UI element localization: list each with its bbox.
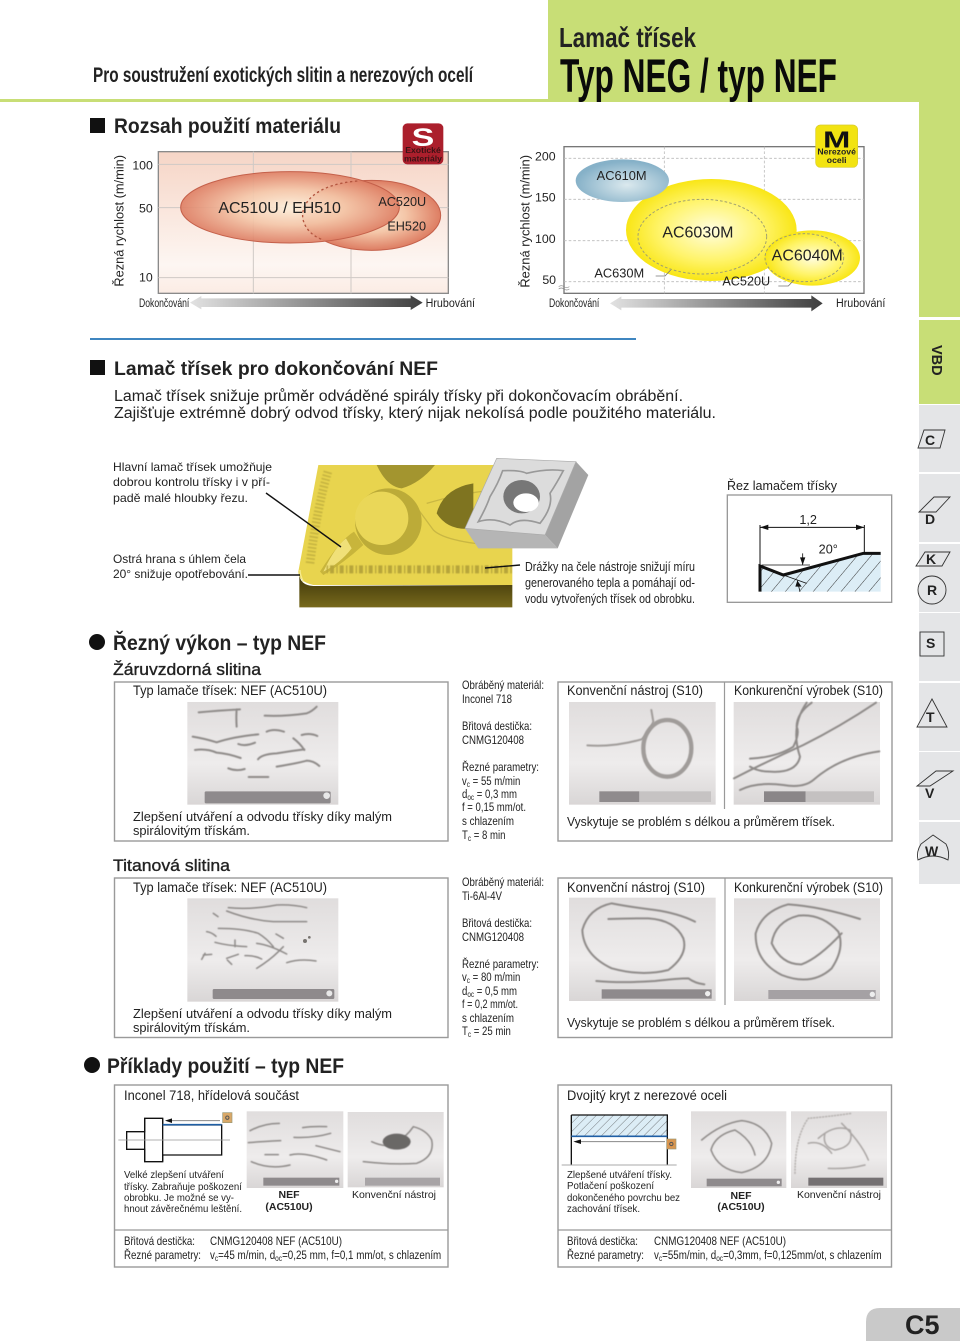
caption: Potlačení poškození	[567, 1180, 654, 1192]
caption	[133, 809, 392, 838]
text block: titanium parameters: CNMG120408	[462, 930, 524, 944]
text block: Inconel parameters: Inconel 718	[462, 692, 512, 706]
callout: main chip breaker: dobrou kontrolu třísky i v pří-	[113, 475, 270, 489]
chart: exotic materials	[111, 123, 475, 310]
parameters: oc	[716, 1253, 723, 1263]
tab: VBD: VBD	[928, 345, 944, 376]
text block: Inconel parameters: Břitová destička:	[462, 719, 532, 733]
text block: titanium parameters: c	[467, 975, 470, 985]
arrow: finishing to roughing	[549, 295, 886, 311]
label: NEF	[717, 1190, 765, 1213]
panel: comparison Inconel	[558, 682, 892, 841]
parameters: oc	[275, 1253, 282, 1263]
diagram: shaft	[118, 1113, 232, 1162]
caption: Zlepšení utváření a odvodu třísky díky malým	[133, 1006, 392, 1021]
tab: V	[917, 771, 953, 801]
text block: Inconel parameters: s chlazením	[462, 814, 514, 828]
subtitle: Pro soustružení: Pro soustružení exotických slitin a nerezových ocelí	[93, 64, 474, 87]
panel: comparison Inconel: Vyskytuje se problém s délkou a průměrem třísek.	[567, 814, 835, 829]
caption	[124, 1169, 242, 1215]
text block: titanium parameters: = 25 min	[471, 1025, 511, 1038]
labels: AC520U and EH520: AC520U	[378, 195, 426, 209]
photo: NEF chips	[691, 1111, 786, 1188]
panel: comparison titanium: Konvenční nástroj (S10)	[567, 880, 705, 895]
text block: titanium parameters: Obráběný materiál:	[462, 875, 544, 889]
text block: Inconel parameters: c	[468, 833, 471, 843]
callout leader lines	[248, 493, 520, 575]
text block: titanium parameters	[462, 875, 544, 1039]
panel: comparison titanium: Vyskytuje se problém s délkou a průměrem třísek.	[567, 1015, 835, 1030]
axis ticks: 50	[542, 273, 556, 287]
parameters: =0,3mm, f=0,125mm/ot, s chlazením	[723, 1249, 882, 1262]
badge: S: Exotické	[405, 145, 441, 155]
axis ticks: 100	[132, 158, 153, 172]
panel: NEF Inconel	[114, 682, 448, 841]
arrow: finishing to roughing: Dokončování	[549, 296, 600, 310]
caption: Velké zlepšení utváření	[124, 1169, 224, 1181]
axis label: Řezná rychlost (m/min)	[517, 155, 532, 288]
axis ticks: 200	[535, 150, 556, 164]
label: AC520U	[722, 274, 794, 288]
photo: conventional chips	[348, 1112, 444, 1187]
arrow: finishing to roughing	[139, 295, 475, 310]
parameters: Řezné parametry:	[124, 1247, 201, 1262]
caption: spirálovitým třískám.	[133, 1020, 250, 1035]
axis ticks	[132, 158, 153, 284]
callout: grooves: vodu vytvořených třísek od obrobku.	[525, 591, 695, 606]
tab: S: S	[926, 635, 935, 651]
text block: titanium parameters: v	[462, 971, 467, 984]
text block: Inconel parameters: f = 0,15 mm/ot.	[462, 800, 526, 814]
parameters: CNMG120408 NEF (AC510U)	[210, 1234, 342, 1248]
tab: K: K	[926, 551, 936, 567]
text block: Inconel parameters: c	[467, 779, 470, 789]
label: NEF: NEF	[730, 1190, 752, 1202]
ellipse: AC6040M	[765, 230, 860, 286]
tab: C: C	[925, 432, 935, 448]
caption: hnout závěrečnému leštění.	[124, 1203, 242, 1215]
text block: Inconel parameters	[462, 678, 544, 843]
label: conventional: Konvenční nástroj	[797, 1189, 881, 1201]
panel: Inconel shaft example	[114, 1085, 448, 1267]
photo: conventional chips	[569, 702, 716, 805]
tab: D	[919, 497, 950, 527]
text block: Inconel parameters: Řezné parametry:	[462, 759, 539, 774]
ellipse: AC520U / EH520	[303, 180, 441, 250]
text block: Inconel parameters: = 55 m/min	[470, 775, 520, 788]
axis break mark	[559, 286, 569, 290]
parameters: =45 m/min, d	[218, 1249, 275, 1262]
text block: titanium parameters: = 0,5 mm	[474, 985, 517, 998]
caption: třísky. Zabraňuje poškození	[124, 1181, 242, 1193]
caption: spirálovitým třískám.	[133, 823, 250, 838]
badge: M: oceli	[827, 155, 847, 165]
ellipse: AC6030M	[626, 179, 797, 281]
callout: main chip breaker: padě malé hloubky řezu.	[113, 491, 248, 505]
badge: M: M	[823, 126, 850, 152]
arrow: finishing to roughing: Hrubování	[426, 296, 475, 310]
caption: Zlepšení utváření a odvodu třísky díky malým	[133, 809, 392, 824]
caption: Zlepšené utváření třísky.	[567, 1169, 672, 1181]
heading: Příklady použití: Příklady použití – typ NEF	[107, 1055, 344, 1078]
label: NEF: (AC510U)	[265, 1201, 313, 1213]
panel: NEF titanium: Typ lamače třísek: NEF (AC510U)	[133, 880, 327, 895]
badge: S	[403, 123, 443, 164]
parameters: v	[210, 1249, 215, 1262]
small grey insert	[465, 458, 588, 548]
tab: S	[920, 632, 944, 656]
caption	[567, 1169, 680, 1215]
text block: Inconel parameters: oc	[467, 792, 474, 802]
axis ticks	[535, 150, 556, 287]
text block: Inconel parameters: d	[462, 788, 467, 801]
callout: grooves: Drážky na čele nástroje snižují míru	[525, 559, 695, 574]
heading: Lamač třísek pro dokončování NEF: Lamač třísek pro dokončování NEF	[114, 359, 438, 380]
chart: stainless steels	[517, 125, 886, 311]
text block: intro: Zajišťuje extrémně dobrý odvod třísky, který nijak nekolísá podle použitého materiálu.	[114, 405, 716, 422]
text block: titanium parameters: s chlazením	[462, 1011, 514, 1025]
badge: S: S	[412, 125, 434, 152]
photo: NEF chips	[247, 1111, 343, 1188]
ellipse: AC6040M: AC6040M	[772, 248, 843, 265]
callout: grooves	[525, 559, 695, 606]
labels: AC520U and EH520: EH520	[387, 220, 426, 234]
axis ticks: 50	[139, 201, 153, 215]
panel: comparison Inconel: Konkurenční výrobek (S10)	[734, 683, 883, 698]
ellipse: AC6030M: AC6030M	[662, 224, 733, 241]
parameters: Břitová destička:	[124, 1234, 195, 1248]
label: conventional: Konvenční nástroj	[352, 1189, 436, 1201]
text block: titanium parameters: Ti-6Al-4V	[462, 889, 502, 903]
parameters: Řezné parametry:	[567, 1247, 644, 1262]
axis ticks: 10	[139, 270, 153, 284]
tab: K	[916, 551, 950, 567]
page number	[866, 1308, 960, 1341]
photo: competitor chips	[734, 702, 880, 805]
label: NEF: NEF	[278, 1189, 300, 1201]
text block: Inconel parameters: = 8 min	[471, 829, 505, 842]
labels: AC520U and EH520	[378, 195, 426, 234]
parameters: c	[659, 1253, 662, 1263]
photo: NEF chips	[187, 702, 338, 805]
panel: stainless cover example	[558, 1085, 892, 1267]
dimension: 1,2: 1,2	[799, 513, 817, 527]
photo: conventional chips	[569, 898, 716, 1001]
heading: Řezný výkon: Řezný výkon – typ NEF	[113, 631, 326, 655]
divider line blue	[90, 338, 636, 340]
label: AC630M	[594, 265, 671, 280]
panel: stainless cover example: Dvojitý kryt z nerezové oceli	[567, 1088, 727, 1103]
text block: titanium parameters: f = 0,2 mm/ot.	[462, 997, 518, 1011]
text block: titanium parameters: = 80 m/min	[470, 971, 520, 984]
panel: NEF titanium	[114, 878, 448, 1038]
parameters: c	[215, 1253, 218, 1263]
text block: titanium parameters: Řezné parametry:	[462, 956, 539, 971]
tab: D: D	[925, 511, 935, 527]
callout: sharp edge	[113, 552, 248, 581]
text block: Inconel parameters: CNMG120408	[462, 733, 524, 747]
label: AC520U: AC520U	[722, 274, 770, 288]
callout: grooves: generovaného tepla a pomáhají od-	[525, 575, 695, 590]
badge: M	[816, 125, 858, 167]
callout: main chip breaker	[113, 460, 272, 505]
text block: titanium parameters: c	[468, 1029, 471, 1039]
text block: Inconel parameters: v	[462, 775, 467, 788]
parameters	[124, 1234, 441, 1263]
page number: C5	[905, 1310, 940, 1340]
photo: competitor chips	[734, 898, 880, 1001]
caption: dokončeného povrchu bez	[567, 1192, 680, 1204]
caption	[133, 1006, 392, 1035]
arrow: finishing to roughing: Dokončování	[139, 296, 190, 310]
caption: obrobku. Je možné se vy-	[124, 1192, 234, 1204]
title: Typ NEG / typ NEF: Typ NEG / typ NEF	[560, 49, 837, 102]
tab: T: T	[926, 709, 935, 725]
tab: R	[918, 576, 946, 604]
text block: Inconel parameters: T	[462, 829, 468, 842]
badge: M: Nerezové	[817, 146, 856, 156]
tab: W	[917, 835, 949, 860]
parameters: CNMG120408 NEF (AC510U)	[654, 1234, 786, 1248]
label: NEF: (AC510U)	[717, 1201, 765, 1213]
ellipse: AC610M: AC610M	[597, 168, 647, 183]
illustration: yellow insert and grey insert	[298, 458, 588, 607]
parameters: =55m/min, d	[662, 1249, 716, 1262]
arrow: finishing to roughing: Hrubování	[836, 296, 886, 310]
badge: S: materiály	[404, 154, 442, 164]
subheading: Žáruvzdorná slitina: Žáruvzdorná slitina	[113, 660, 262, 679]
text block: titanium parameters: d	[462, 985, 467, 998]
panel: comparison titanium	[558, 878, 892, 1038]
caption: zachování třísek.	[567, 1203, 640, 1215]
photo: conventional chips	[791, 1111, 887, 1188]
text block: titanium parameters: oc	[467, 989, 474, 999]
heading: Lamač třísek: Lamač třísek	[559, 22, 696, 53]
ellipse: AC510U / EH510	[181, 172, 399, 243]
dimension: 20°: 20°	[819, 542, 838, 556]
tab: W: W	[925, 843, 939, 859]
side tabs	[916, 320, 960, 884]
parameters: v	[654, 1249, 659, 1262]
ellipse: AC510U / EH510: AC510U / EH510	[218, 200, 341, 217]
text block: intro	[114, 388, 716, 422]
parameters: Břitová destička:	[567, 1234, 638, 1248]
diagram: chip breaker section	[727, 495, 892, 602]
tab: T	[917, 699, 947, 727]
parameters	[567, 1234, 882, 1263]
callout: main chip breaker: Hlavní lamač třísek umožňuje	[113, 460, 272, 474]
tab: V: V	[925, 785, 935, 801]
text block: titanium parameters: T	[462, 1025, 468, 1038]
text block: Inconel parameters: Obráběný materiál:	[462, 678, 544, 692]
heading: Rozsah použití materiálu: Rozsah použití materiálu	[114, 115, 341, 138]
diagram: cover	[562, 1115, 677, 1165]
photo: NEF chips	[187, 898, 338, 1002]
panel: Inconel shaft example: Inconel 718, hřídelová součást	[124, 1088, 299, 1103]
tab: C	[918, 430, 945, 448]
header band	[0, 0, 960, 317]
axis ticks: 100	[535, 232, 556, 246]
text block: titanium parameters: Břitová destička:	[462, 916, 532, 930]
parameters: =0,25 mm, f=0,1 mm/ot, s chlazením	[282, 1249, 441, 1262]
text block: Inconel parameters: = 0,3 mm	[474, 788, 517, 801]
text block: intro: Lamač třísek snižuje průměr odváděné spirály třísky při dokončovacím obrábění.	[114, 388, 683, 405]
label: NEF	[265, 1189, 313, 1213]
callout: sharp edge: Ostrá hrana s úhlem čela	[113, 552, 246, 566]
ellipse: AC610M	[576, 159, 669, 202]
panel: comparison Inconel: Konvenční nástroj (S10)	[567, 683, 703, 698]
panel: NEF Inconel: Typ lamače třísek: NEF (AC510U)	[133, 683, 327, 698]
panel: comparison titanium: Konkurenční výrobek (S10)	[734, 880, 883, 895]
tab: R: R	[927, 582, 937, 598]
callout: sharp edge: 20° snižuje opotřebování.	[113, 567, 248, 581]
subheading: Titanová slitina: Titanová slitina	[113, 857, 231, 875]
label: AC630M: AC630M	[594, 265, 644, 280]
axis label: Řezná rychlost (m/min)	[111, 155, 126, 287]
axis ticks: 150	[535, 191, 556, 205]
heading: section diagram: Řez lamačem třísky	[727, 478, 837, 493]
